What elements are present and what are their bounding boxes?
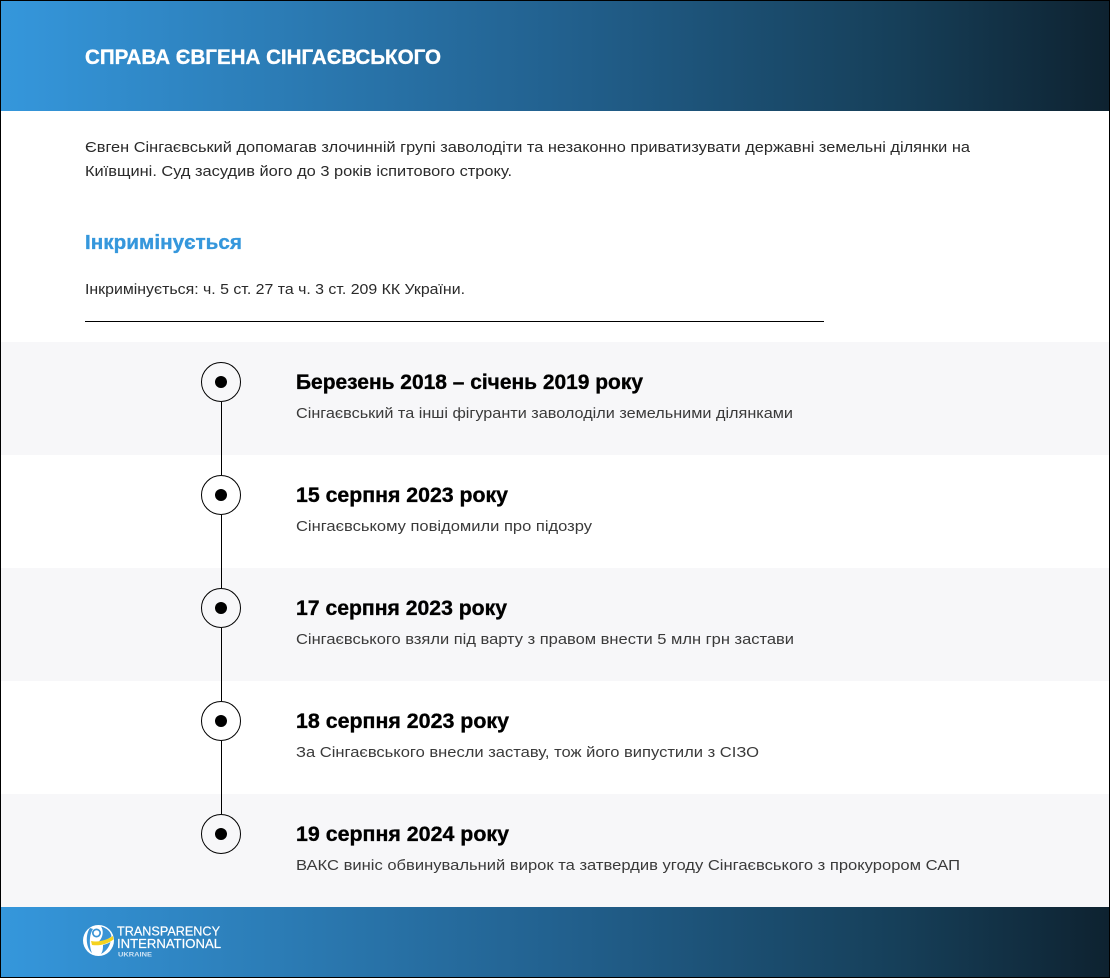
logo [83,924,221,958]
logo wordmark [117,924,221,958]
event 1 description: Сінгаєвський та інші фігуранти заволоділи земельними ділянками [296,405,793,422]
section heading: Інкримінується [85,232,242,254]
row backgrounds [1,342,1109,907]
event 5 description: ВАКС виніс обвинувальний вирок та затвердив угоду Сінгаєвського з прокурором САП [296,857,960,874]
timeline connector line [221,402,222,814]
timeline event 5 [202,814,960,874]
event 3 description: Сінгаєвського взяли під варту з правом внести 5 млн грн застави [296,631,794,648]
event 5 date: 19 серпня 2024 року [296,823,509,846]
marker 4 [202,702,240,740]
event 3 date: 17 серпня 2023 року [296,597,507,620]
timeline event 3 [202,588,794,648]
marker 3 [202,588,240,628]
event 2 date: 15 серпня 2023 року [296,484,508,507]
event 2 description: Сінгаєвському повідомили про підозру [296,518,593,535]
timeline event 4 [202,702,759,761]
marker 2 [202,476,240,514]
marker 5 [202,814,240,854]
intro paragraph: Київщині. Суд засудив його до 3 років іспитового строку. [85,163,512,180]
event 4 date: 18 серпня 2023 року [296,710,509,733]
timeline event 2 [202,476,593,535]
logo wordmark: INTERNATIONAL [117,937,221,951]
event 4 description: За Сінгаєвського внесли заставу, тож його випустили з СІЗО [296,744,759,761]
logo wordmark: TRANSPARENCY [117,924,221,938]
intro paragraph: Євген Сінгаєвський допомагав злочинній групі заволодіти та незаконно приватизувати державні земельні ділянки на [85,139,971,156]
intro paragraph [85,139,971,180]
footer banner [1,907,1109,977]
timeline event 1 [202,362,793,422]
header banner [1,1,1109,111]
charges text: Інкримінується: ч. 5 ст. 27 та ч. 3 ст. 209 КК України. [85,281,465,298]
logo icon [83,925,114,956]
title: СПРАВА ЄВГЕНА СІНГАЄВСЬКОГО [85,46,441,69]
event 1 date: Березень 2018 – січень 2019 року [296,371,643,394]
marker 1 [202,362,240,402]
logo wordmark: UKRAINE [118,952,153,958]
